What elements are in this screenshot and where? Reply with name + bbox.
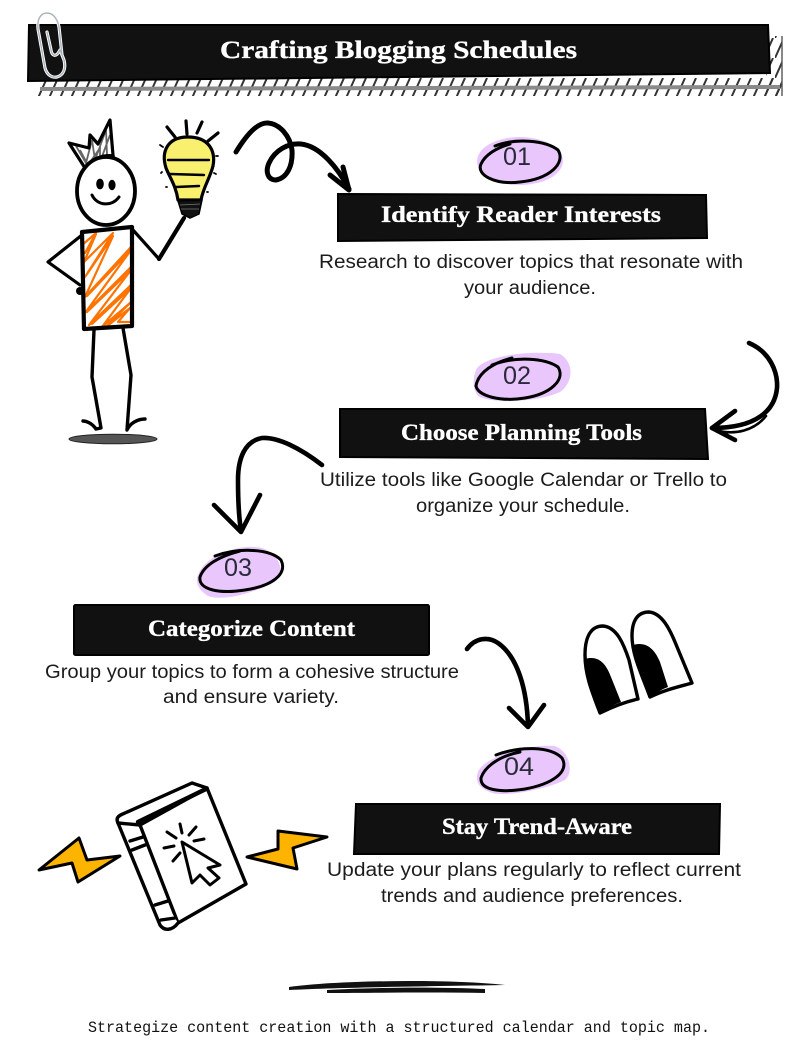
step 4 description [327,860,742,907]
step 1 heading: Identify Reader Interests [381,202,661,227]
arrow to step 1 [236,123,349,190]
crown [69,120,113,168]
badge 04 [477,746,570,794]
step 1 description: Research to discover topics that resonate with [319,252,743,273]
step 3 description [45,662,459,708]
title banner [28,13,782,96]
badge 01 [477,137,563,185]
arrow to step 3 [214,438,322,532]
googly eyes [585,612,692,713]
left lightning bolt [39,838,120,882]
right eye [632,612,692,697]
step 1 description: your audience. [464,278,596,299]
orange shirt scribble [81,233,131,327]
step 3 heading bar [74,605,429,655]
book with cursor icon [117,783,246,929]
badge 03: 03 [224,554,252,582]
step 2 description: organize your schedule. [416,496,630,517]
book body [117,783,246,929]
arrow to step 4 [467,639,544,727]
step 3 description: and ensure variety. [163,687,339,708]
torso [82,227,132,329]
step 4 [327,746,742,907]
step 1 description [319,252,743,299]
banner hatch shadow [38,36,782,96]
stick figure holding light bulb [48,120,218,444]
step 4 heading bar [354,804,720,854]
head [77,157,135,225]
step 2 heading bar [340,409,708,459]
step 2 [320,353,727,517]
step 1 heading bar [338,194,707,241]
banner heading: Crafting Blogging Schedules [220,37,577,64]
step 2 heading: Choose Planning Tools [401,420,642,445]
step 3 heading: Categorize Content [148,616,355,641]
light bulb [160,121,218,218]
badge 04: 04 [504,753,534,781]
cursor [164,824,220,885]
step 4 heading: Stay Trend-Aware [442,814,632,839]
banner bar [28,25,770,81]
badge 03 [197,547,283,598]
footer caption: Strategize content creation with a structured calendar and topic map. [88,1019,710,1037]
badge 02 [474,353,570,401]
badge 02: 02 [503,362,531,390]
right lightning bolt [247,831,327,869]
step 3 description: Group your topics to form a cohesive structure [45,662,459,683]
arrow to step 2 [712,343,777,440]
left eye [585,626,638,713]
step 4 description: trends and audience preferences. [381,886,683,907]
badge 01: 01 [503,143,531,171]
ground shadow [69,434,157,444]
footer brush strokes [289,981,505,993]
step 2 description [320,470,727,517]
paperclip [38,13,65,77]
step 3 [45,547,459,708]
legs [83,328,145,430]
step 2 description: Utilize tools like Google Calendar or Trello to [320,470,727,491]
arms [48,218,184,295]
step 4 description: Update your plans regularly to reflect current [327,860,742,881]
step 1 [319,137,743,299]
